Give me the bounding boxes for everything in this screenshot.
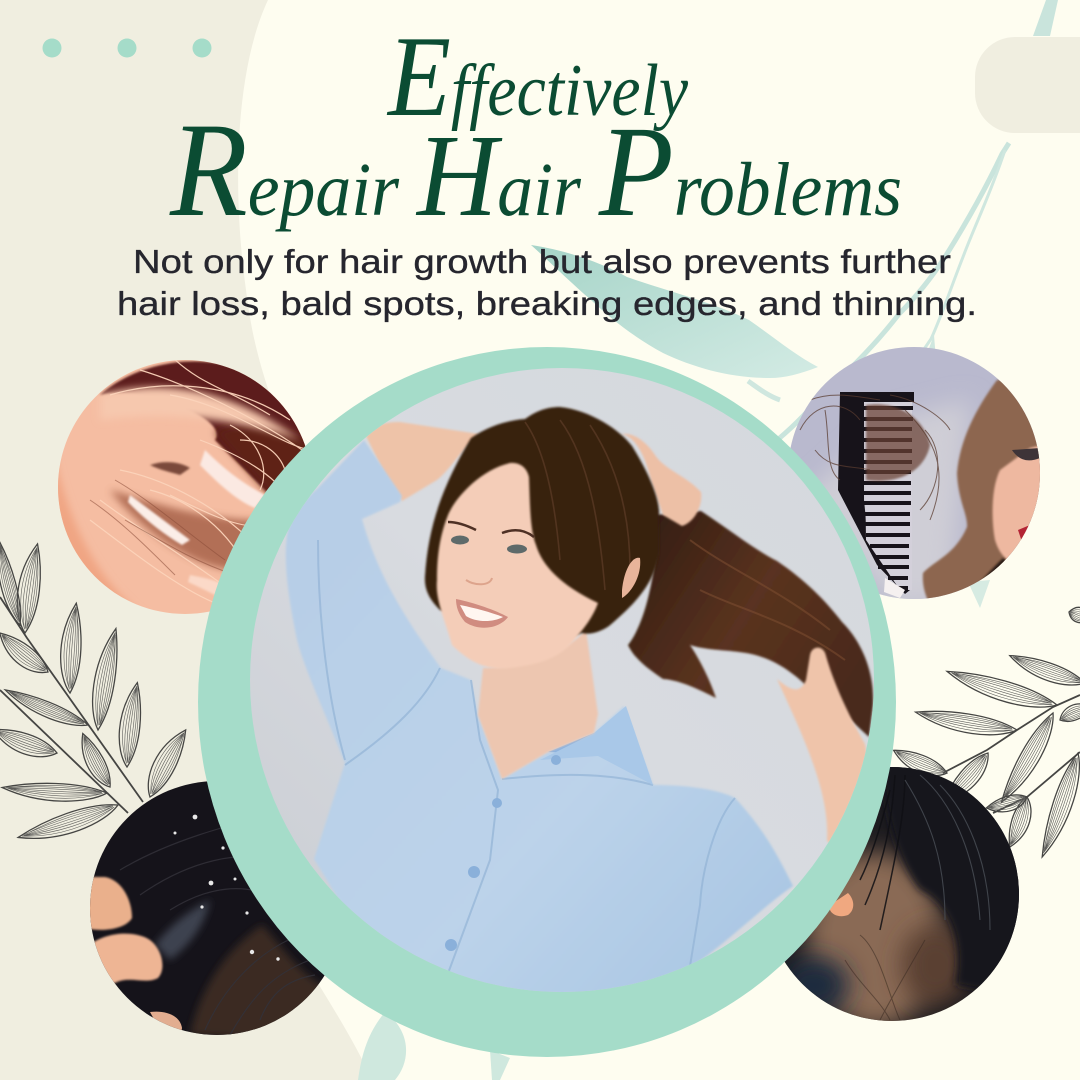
photo: split ends	[58, 360, 306, 614]
subtitle	[117, 243, 977, 322]
background pale teal leaves	[358, 0, 1058, 1080]
finger behind ring	[830, 893, 853, 916]
hand in hair	[621, 434, 701, 526]
teal ring	[198, 347, 896, 1057]
background: beige left shape	[0, 0, 372, 1080]
raised arm	[366, 422, 479, 501]
main photo: woman holding ponytail	[240, 360, 890, 1010]
shirt collar	[540, 706, 653, 785]
brown streak	[190, 925, 330, 1040]
neck	[478, 630, 598, 779]
shirt inner collar	[548, 733, 594, 752]
photo: dandruff	[90, 781, 324, 1035]
photo background	[240, 360, 890, 1010]
eyes and brows	[448, 522, 534, 554]
line art branch: right	[889, 604, 1080, 861]
large pale leaf	[531, 245, 818, 378]
subtitle line 1: Not only for hair growth but also prevents further	[133, 243, 951, 280]
decorative shape: top right pill	[975, 37, 1080, 133]
shirt buttons	[445, 755, 561, 951]
shirt shading	[318, 540, 735, 995]
title line 2: Repair Hair Problems	[169, 96, 902, 245]
decorative dots	[42, 38, 212, 58]
photo: thinning hair	[784, 767, 1019, 1021]
photo: hair on comb	[786, 345, 1042, 610]
head hair	[425, 407, 659, 640]
line art branch: left	[0, 539, 193, 849]
ponytail	[628, 511, 873, 737]
title line 1: Effectively	[386, 13, 688, 141]
fingers	[86, 877, 132, 930]
mouth	[456, 599, 508, 628]
forearm and hand on tail	[777, 646, 866, 843]
face	[437, 463, 598, 669]
woman hair and face	[923, 380, 1042, 605]
nose shadow	[466, 578, 492, 584]
title	[169, 13, 902, 245]
comb	[838, 392, 914, 594]
shirt	[286, 440, 793, 1000]
subtitle line 2: hair loss, bald spots, breaking edges, and thinning.	[117, 285, 977, 322]
ear	[622, 558, 640, 598]
